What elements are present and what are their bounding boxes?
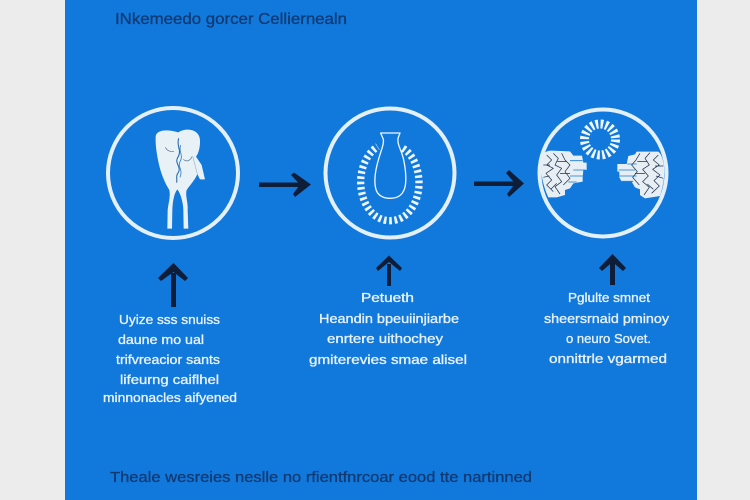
text block 2: [309, 290, 467, 367]
icon: hands and ring in circle: [540, 110, 666, 236]
text block 3: onnittrle vgarmed: [549, 351, 667, 366]
up arrow 1: [158, 263, 188, 307]
text block 1: daune mo ual: [118, 332, 204, 347]
text block 1: trifvreacior sants: [116, 352, 221, 367]
text block 3: sheersrnaid pminoy: [544, 311, 670, 326]
text block 2: gmiterevies smae alisel: [309, 352, 467, 367]
title: INkemeedo gorcer Celliernealn: [115, 11, 347, 28]
text block 1: [103, 312, 237, 405]
text block 2: Petueth: [361, 290, 414, 305]
arrow: bottle to hands: [474, 170, 524, 197]
icon: bottle with radial dashes in circle: [326, 108, 454, 238]
text block 2: enrtere uithochey: [327, 331, 444, 346]
text block 1: minnonacles aifyened: [103, 390, 237, 405]
right hand: [617, 152, 664, 198]
sun ring: [584, 124, 616, 155]
text block 1: Uyize sss snuiss: [119, 312, 221, 327]
left hand: [541, 151, 587, 197]
text block 3: [544, 290, 670, 366]
up arrow 2: [376, 256, 402, 286]
footer note: Theale wesreies neslle no rfientfnrcoar eood tte nartinned: [110, 469, 532, 486]
up arrow 3: [599, 254, 626, 285]
icon: cracked tooth in circle: [108, 108, 238, 238]
text block 3: o neuro Sovet.: [566, 331, 651, 346]
arrow: tooth to bottle: [259, 172, 311, 197]
text block 2: Heandin bpeuiinjiarbe: [319, 311, 459, 326]
text block 1: lifeurng caiflhel: [120, 372, 219, 387]
text block 3: Pglulte smnet: [568, 290, 650, 305]
